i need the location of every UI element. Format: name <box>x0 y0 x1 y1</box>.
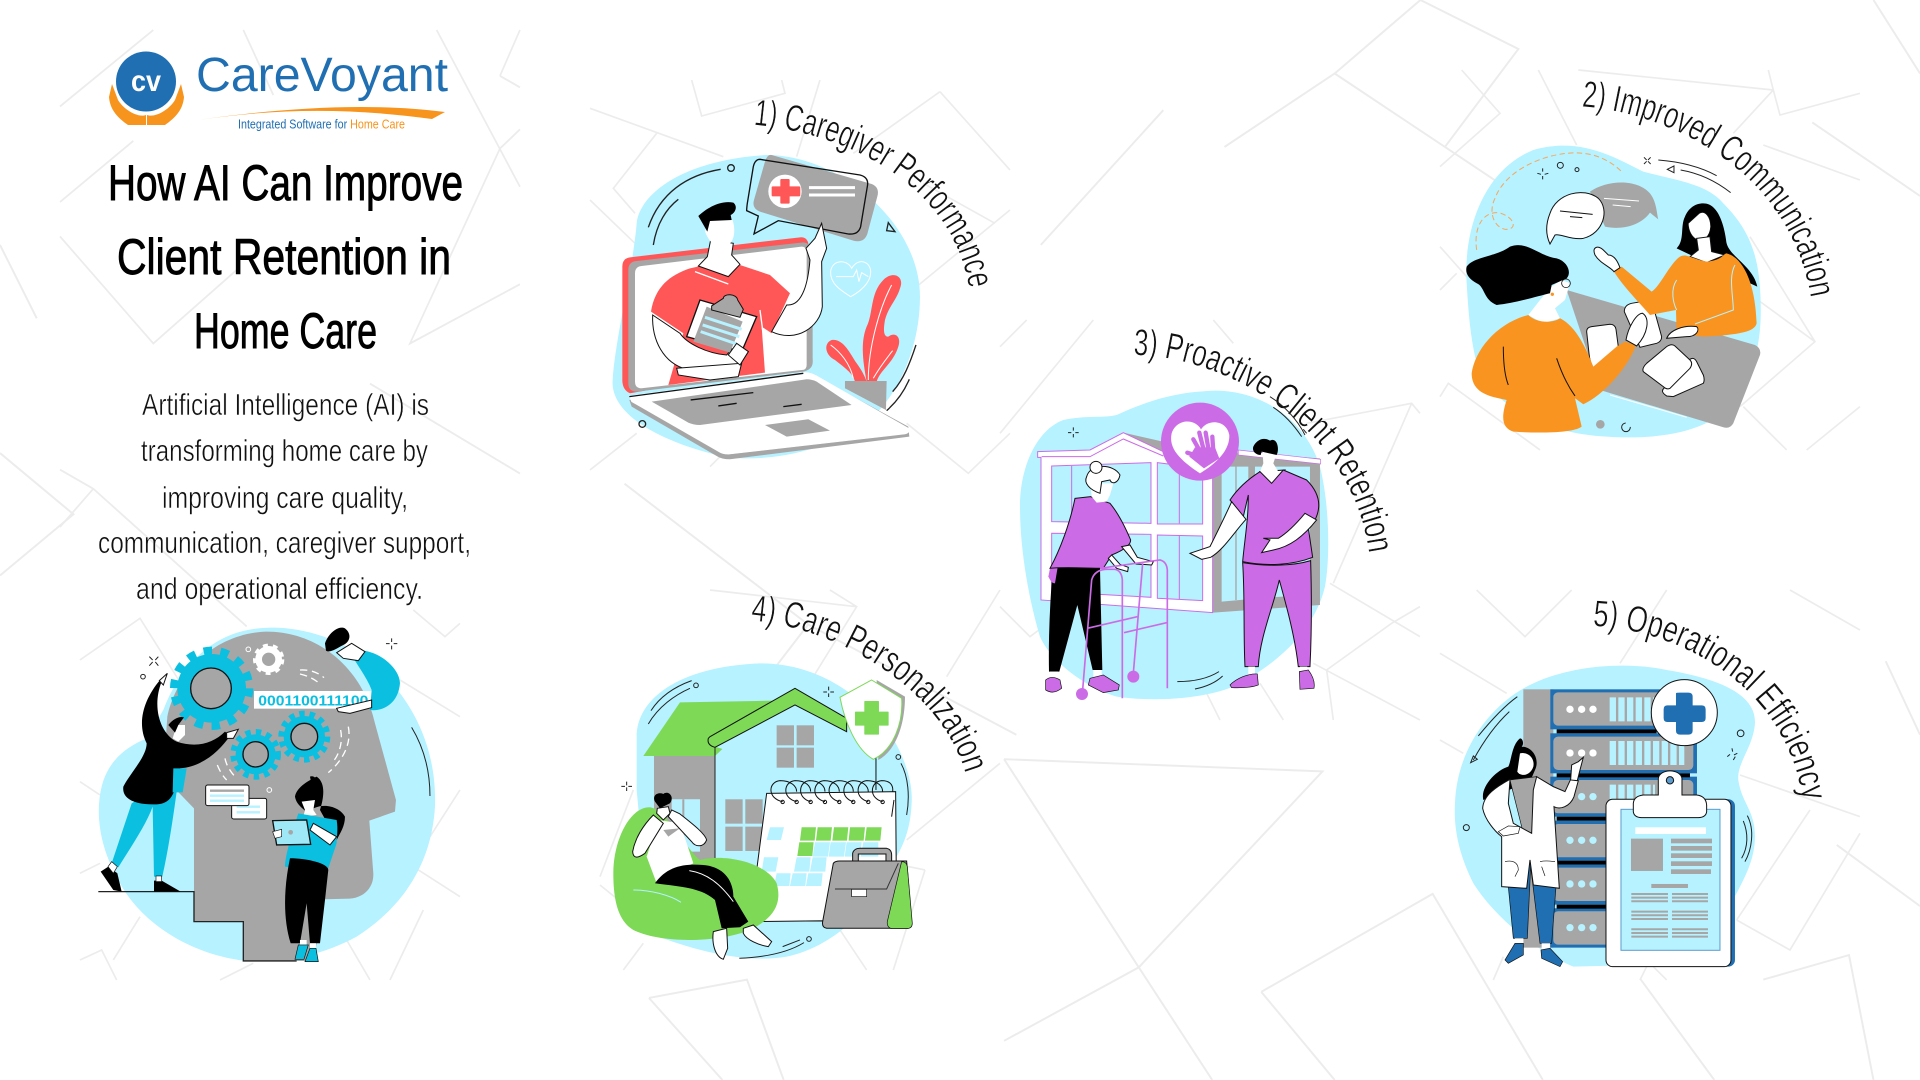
blob <box>1020 391 1328 699</box>
figure: woman with tablet <box>273 776 345 962</box>
briefcase <box>803 848 912 929</box>
figure: left person on stairs <box>101 673 238 892</box>
speech bubbles <box>1547 182 1658 244</box>
panel: 2 improved communication <box>1466 81 1830 438</box>
figure: elderly client with walker <box>1046 461 1153 693</box>
illustration: AI head with gears <box>98 628 435 962</box>
intro text block: communication, caregiver support, <box>98 525 471 560</box>
figure: woman with glasses seen from behind <box>1466 245 1647 433</box>
icon: health shield <box>840 680 905 790</box>
small gears <box>234 714 327 776</box>
sparkles and arc <box>141 638 430 796</box>
heading: 4) Care Personalization: 4) Care Personalization <box>752 595 982 772</box>
swoosh <box>198 107 445 120</box>
intro text block: Artificial Intelligence (AI) is <box>142 387 429 422</box>
figure: top-right person <box>325 628 400 713</box>
white gear <box>246 646 282 673</box>
walker <box>1076 560 1167 700</box>
panel: 5 operational efficiency <box>1454 600 1822 968</box>
arcs and markers <box>1463 697 1752 862</box>
house <box>643 688 853 860</box>
heading: 5) Operational Efficiency: 5) Operational Efficiency <box>1594 600 1822 798</box>
dashes and sparks <box>217 670 349 780</box>
dots <box>1596 420 1630 432</box>
title: Home Care <box>194 303 377 359</box>
figure: man on beanbag <box>633 793 772 959</box>
intro text block: and operational efficiency. <box>136 571 423 606</box>
arcs and sparkles <box>621 681 908 958</box>
speech bubble: care message <box>747 155 878 241</box>
title <box>108 155 463 359</box>
monitor <box>622 237 813 393</box>
large gear <box>174 651 249 726</box>
plant <box>826 275 901 410</box>
dashed orange path <box>1476 153 1622 250</box>
cards <box>1587 301 1704 397</box>
table <box>1567 290 1760 428</box>
title: How AI Can Improve <box>108 155 463 211</box>
intro text block <box>98 387 471 606</box>
panel: 1 caregiver performance <box>612 100 988 460</box>
figure: doctor pointing <box>1483 738 1583 967</box>
title: Client Retention in <box>117 229 451 285</box>
blob <box>1455 666 1755 967</box>
logo: CareVoyant <box>109 49 448 132</box>
wordmark: CareVoyant <box>196 49 448 102</box>
intro text block: transforming home care by <box>141 433 428 468</box>
arcs <box>1068 397 1307 689</box>
tagline: Integrated Software for Home Care <box>238 118 405 132</box>
figure: woman facing left <box>1594 203 1757 338</box>
blob <box>637 663 912 959</box>
beanbag <box>613 807 778 940</box>
building <box>1038 433 1321 613</box>
icon: heart and hand badge <box>1161 403 1239 481</box>
heading: 1) Caregiver Performance: 1) Caregiver Performance <box>755 100 988 286</box>
figure: caregiver in purple scrubs <box>1190 439 1319 689</box>
icon: hands holding CV globe: cv <box>131 65 161 98</box>
icon: medical cross badge <box>1651 680 1717 746</box>
panel: 4 care personalization <box>613 595 982 960</box>
head silhouette with stairs <box>163 632 396 961</box>
heart rate icon <box>831 262 871 297</box>
heading: 3) Proactive Client Retention: 3) Proactive Client Retention <box>1134 329 1388 552</box>
arcs and markers <box>639 165 916 427</box>
calendar <box>750 781 897 922</box>
server rack <box>1523 689 1697 948</box>
binary strip: 0001100111100 <box>258 693 368 709</box>
heading: 2) Improved Communication: 2) Improved Communication <box>1582 81 1830 296</box>
intro text block: improving care quality, <box>162 480 408 515</box>
clipboard with report <box>1606 771 1735 967</box>
figure: caregiver with clipboard <box>651 202 827 385</box>
blob <box>613 155 920 458</box>
laptop base <box>629 373 909 459</box>
blob <box>99 628 435 961</box>
blob <box>1466 146 1761 437</box>
icon: hands holding CV globe <box>109 52 184 125</box>
sparkles and arcs <box>1537 157 1731 193</box>
speech bubbles <box>206 785 272 819</box>
panel: 3 proactive client retention <box>1020 329 1388 700</box>
